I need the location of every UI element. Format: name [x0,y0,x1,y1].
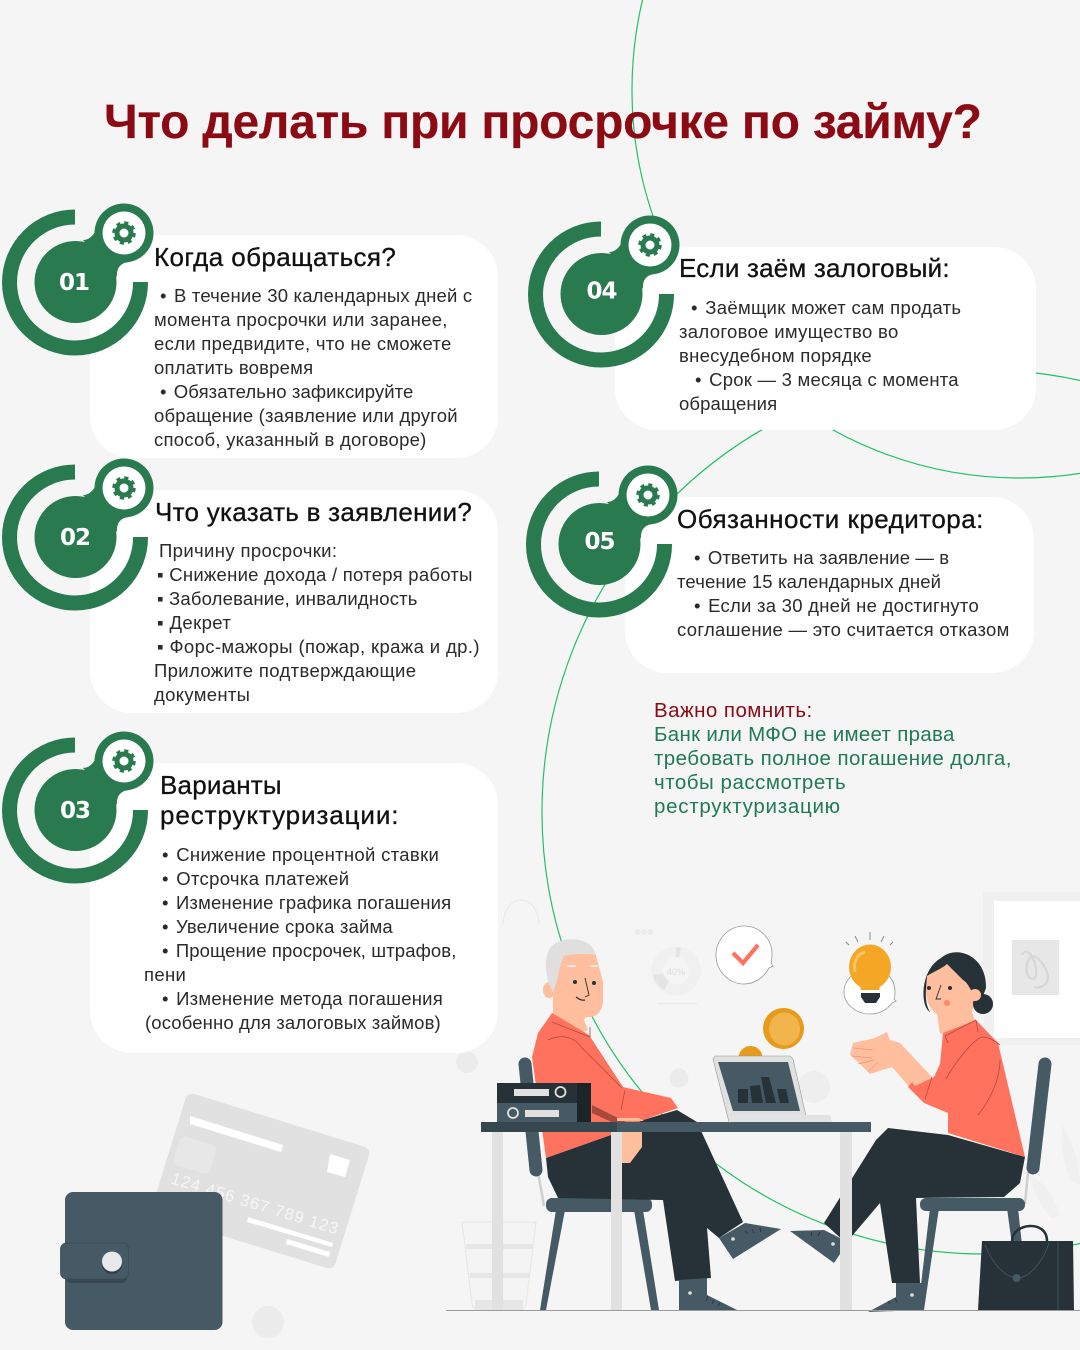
text block: обращение (заявление или другой [154,405,458,426]
text block: • Снижение процентной ставки [162,844,439,865]
man trousers [546,1110,743,1281]
badge 01 [2,204,154,356]
man shirt [532,1013,678,1158]
text block: • Ответить на заявление — в [694,547,949,568]
badge 04 [528,216,680,368]
text block: пени [144,964,186,985]
callout: important note: Важно помнить: [654,699,813,722]
panel: creditor duties [625,497,1034,673]
floor line [446,1310,1080,1311]
panel: secured loan [615,247,1036,430]
text block: Причину просрочки: [159,540,337,561]
woman head [924,952,993,1034]
woman chair [918,1064,1045,1310]
heading [160,770,399,830]
badge 05 [526,466,678,618]
man hand [617,1118,644,1163]
desk [481,1122,871,1310]
text block: • В течение 30 календарных дней с [160,285,472,306]
badge 02: 02 [60,525,90,551]
heading: Обязанности кредитора: [677,504,984,534]
text block: соглашение — это считается отказом [677,619,1010,640]
panel: when to apply [90,235,498,458]
man shoes [679,1223,781,1310]
credit card: 124 456 367 789 123 [169,1170,341,1239]
text block: • Заёмщик может сам продать [691,297,961,318]
callout: important note: Банк или МФО не имеет права [654,723,955,746]
heading: Что указать в заявлении? [155,497,472,527]
text block: Приложите подтверждающие [154,660,416,681]
man head [543,939,603,1035]
faint circle [252,1306,284,1338]
text block: способ, указанный в договоре) [154,429,427,450]
text block: • Если за 30 дней не достигнуто [694,595,979,616]
text block: ▪ Декрет [157,612,231,633]
woman [790,952,1045,1312]
text block: документы [154,684,250,705]
faint donut chart 40%: 40% [667,967,685,977]
heading: Когда обращаться? [154,242,396,272]
heading: реструктуризации: [160,800,399,830]
badge 05: 05 [584,529,614,555]
badge 02 [2,458,154,610]
text block: залоговое имущество во [679,321,899,342]
text block: если предвидите, что не сможете [154,333,452,354]
callout: important note: чтобы рассмотреть [654,771,846,794]
faint donut chart 40% [653,947,695,990]
binders [497,1083,591,1122]
text block: внесудебном порядке [679,345,872,366]
badge 04: 04 [586,278,616,304]
text block: • Увеличение срока займа [162,916,393,937]
text block [677,547,1010,640]
text block: момента просрочки или заранее, [154,309,448,330]
text block: ▪ Снижение дохода / потеря работы [157,564,473,585]
text block [154,285,472,450]
chat bubble with check [716,926,773,984]
text block [154,540,480,705]
text block: ▪ Форс-мажоры (пожар, кража и др.) [157,636,480,657]
text block [144,844,456,1033]
badge 03: 03 [60,798,90,824]
faint waste basket [462,1222,536,1310]
text block: оплатить вовремя [154,357,313,378]
text block: (особенно для залоговых займов) [145,1012,441,1033]
man [525,939,781,1310]
handbag [978,1226,1074,1310]
woman shirt [908,1020,1025,1157]
callout: important note: реструктуризацию [654,795,841,818]
text block [679,297,961,414]
woman arm and hands [850,1032,932,1090]
text block: течение 15 календарных дней [677,571,941,592]
text block: ▪ Заболевание, инвалидность [157,588,418,609]
text block: • Изменение графика погашения [162,892,451,913]
finger lines [852,1048,878,1072]
faint wall picture [983,892,1080,1045]
text block: обращения [679,393,777,414]
panel: restructuring options [90,763,498,1053]
badge 03 [2,732,154,884]
text block: • Обязательно зафиксируйте [160,381,413,402]
credit card [150,1092,371,1270]
man chair [525,1064,659,1310]
callout: important note [654,699,1012,818]
badge 01: 01 [59,270,89,296]
text block: • Изменение метода погашения [162,988,443,1009]
coins [738,1008,804,1070]
faint decorations [456,900,830,1103]
title: Что делать при просрочке по займу? [104,96,982,149]
woman shoes [790,1230,922,1312]
woman trousers [824,1128,1025,1283]
wallet [60,1192,222,1330]
heading: Варианты [160,770,282,800]
faint plant [1030,1125,1080,1218]
panel: what to state [90,490,498,713]
text block: • Отсрочка платежей [162,868,349,889]
bulb bubble [844,932,896,1014]
callout: important note: требовать полное погашение долга, [654,747,1012,770]
text block: • Срок — 3 месяца с момента [695,369,959,390]
laptop [713,1056,832,1122]
heading: Если заём залоговый: [679,253,950,283]
text block: • Прощение просрочек, штрафов, [162,940,456,961]
